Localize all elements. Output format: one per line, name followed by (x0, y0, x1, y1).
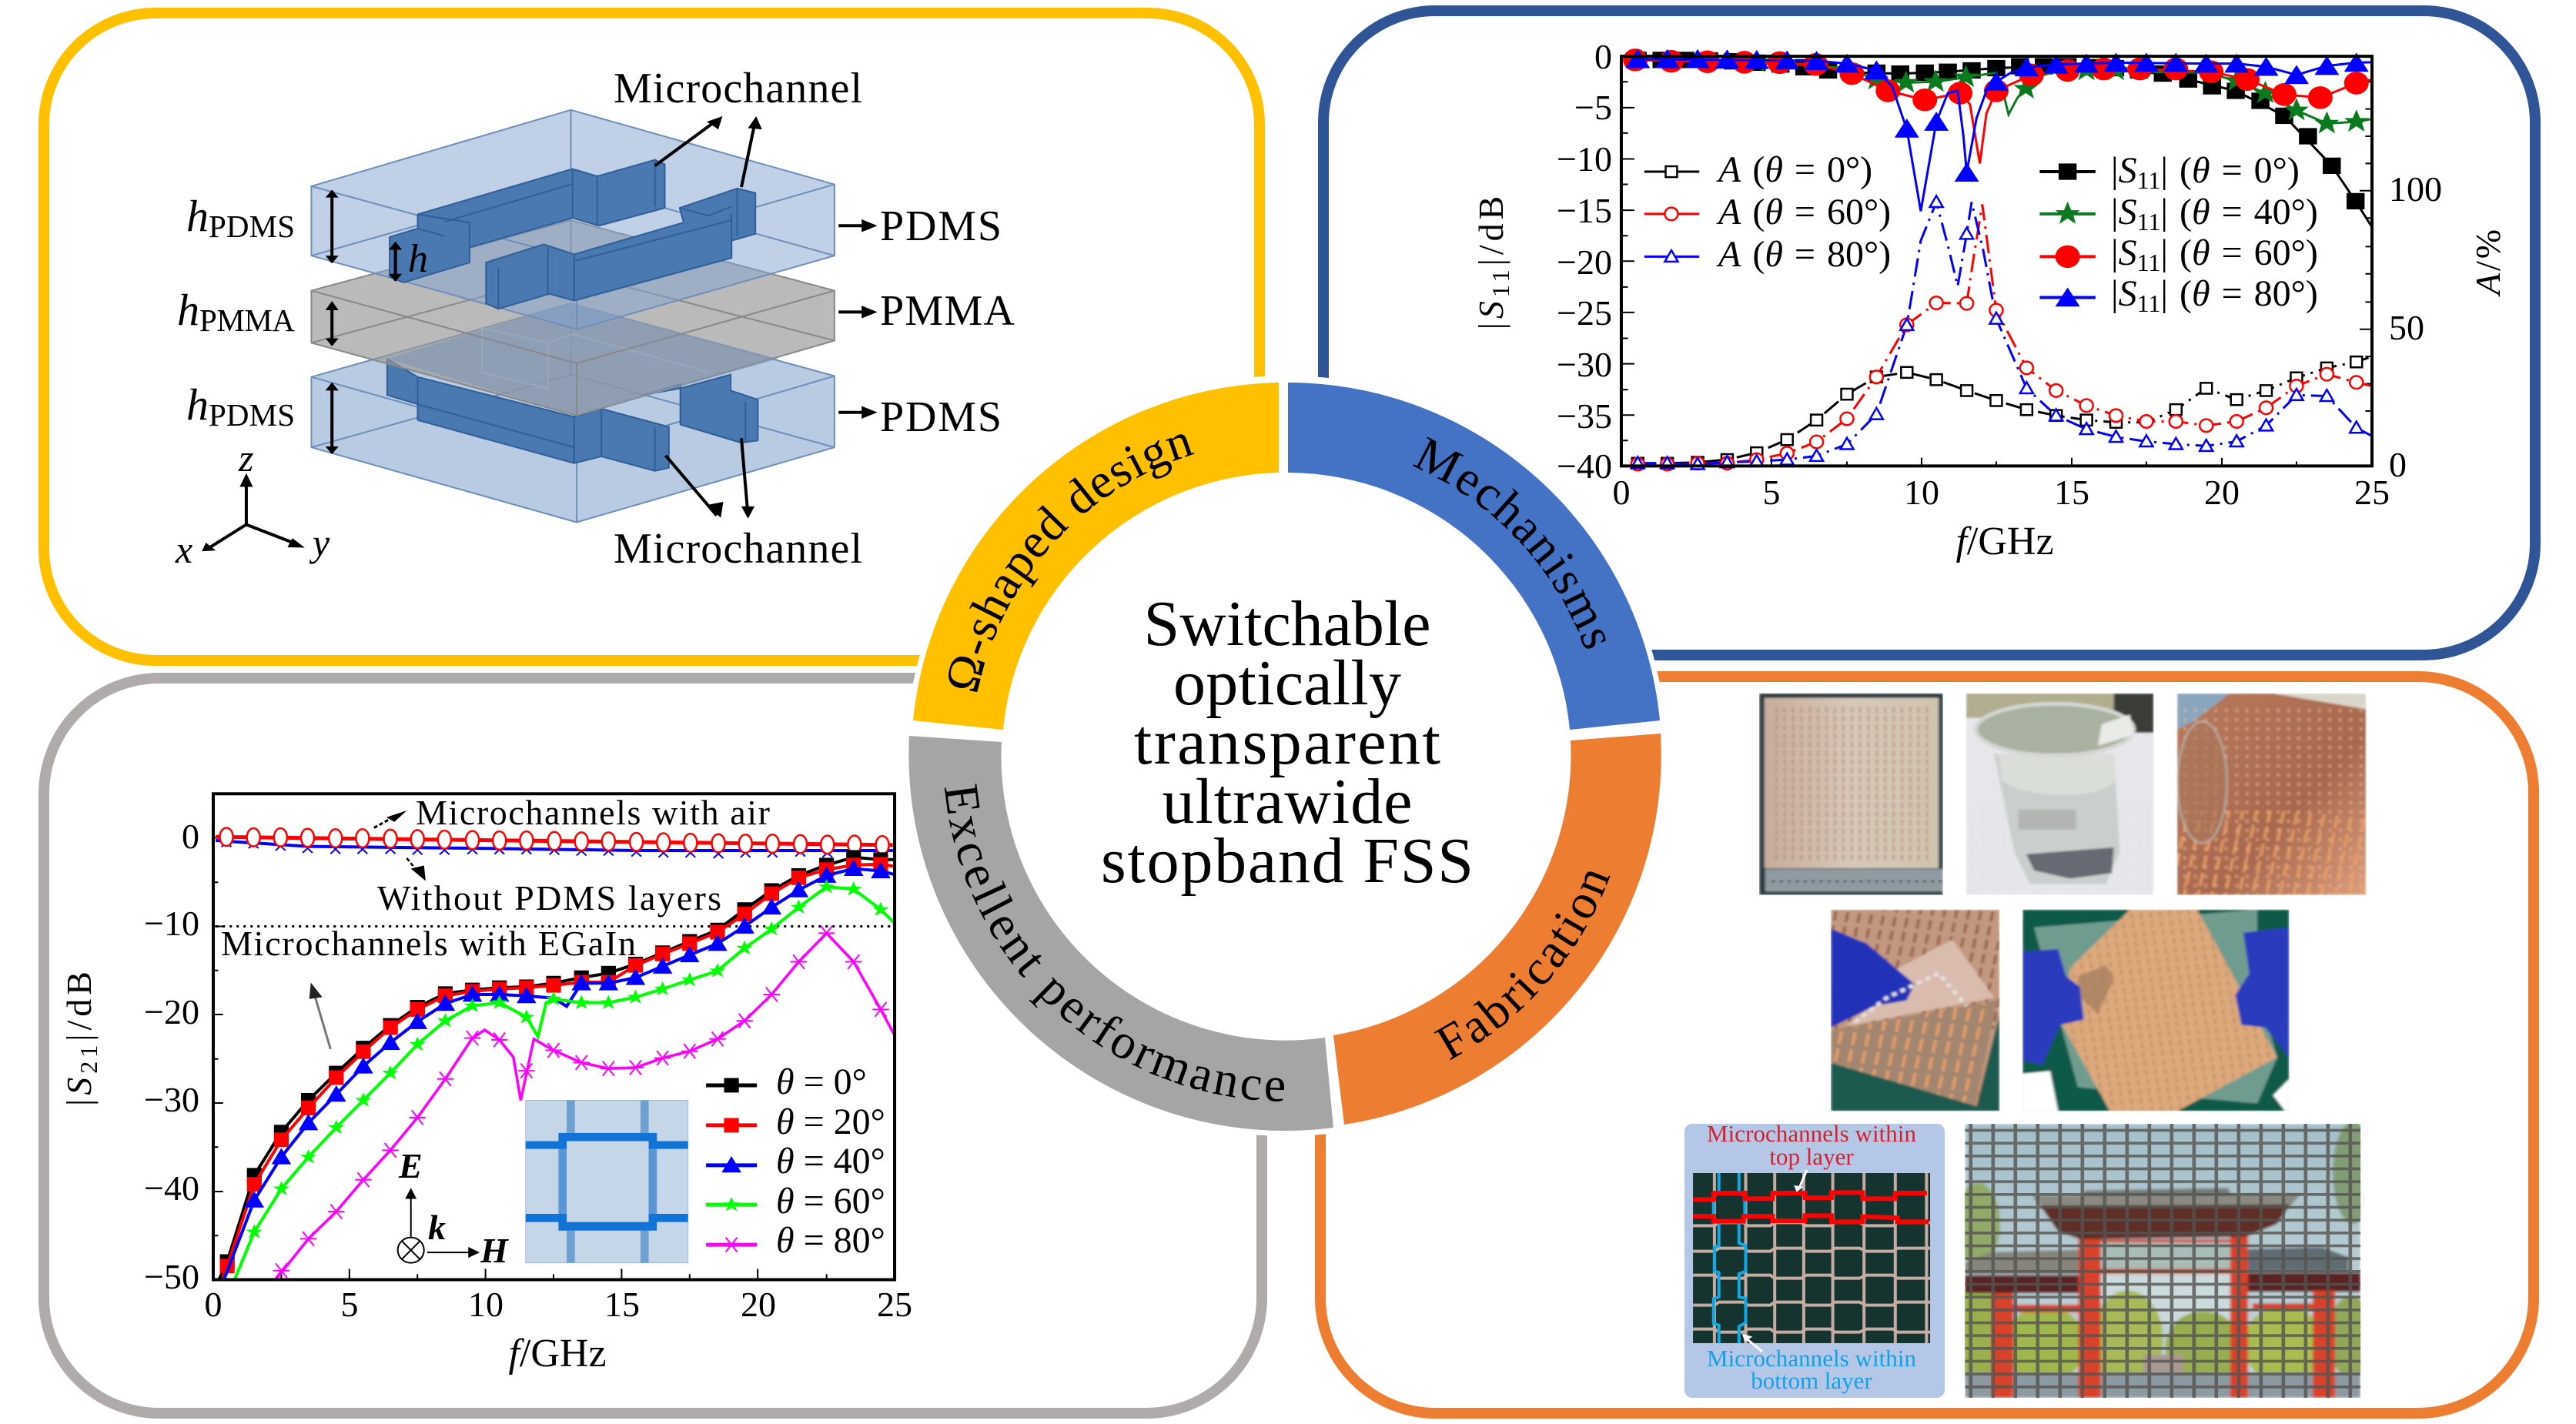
chart: reflection and absorption versus frequency: −25 (1557, 293, 1612, 333)
chart: transmission versus frequency: 20 (741, 1285, 776, 1324)
chart: reflection and absorption versus frequency: |S (1471, 297, 1510, 329)
chart: transmission versus frequency: 15 (604, 1285, 640, 1324)
chart: reflection and absorption versus frequency: 25 (2354, 473, 2390, 512)
structure diagram: layered FSS unit cell: PDMS (880, 393, 1002, 441)
chart: reflection and absorption versus frequency: 50 (2389, 308, 2424, 347)
structure diagram: layered FSS unit cell: h (408, 237, 428, 281)
center title: Switchable (1144, 588, 1430, 660)
chart: reflection and absorption versus frequency: −10 (1557, 139, 1612, 179)
chart: transmission versus frequency: θ = 0° (776, 1061, 867, 1102)
panel: excellent performance frame (44, 678, 1262, 1413)
ring segment: Ω-shaped design: Ω-shaped design (948, 434, 1195, 693)
chart: reflection and absorption versus frequency: −30 (1557, 345, 1612, 384)
chart: transmission versus frequency: θ = 20° (776, 1101, 885, 1142)
chart: transmission versus frequency: H (480, 1231, 509, 1270)
photo panel: fabricated microchannel close-up: top layer (1769, 1143, 1854, 1170)
chart: reflection and absorption versus frequency: −20 (1557, 242, 1612, 282)
chart: transmission versus frequency (59, 793, 912, 1376)
chart: reflection and absorption versus frequency: |S (2111, 273, 2137, 314)
chart: transmission versus frequency: −20 (144, 992, 199, 1031)
chart: reflection and absorption versus frequency (1471, 37, 2507, 563)
chart: reflection and absorption versus frequency: | ( (2160, 273, 2192, 314)
chart: transmission versus frequency: 5 (340, 1285, 359, 1324)
chart: reflection and absorption versus frequency: θ = 60°) (2192, 232, 2318, 273)
chart: reflection and absorption versus frequency: 11 (2137, 166, 2160, 194)
ring segment: Fabrication: Fabrication (1434, 871, 1611, 1061)
chart: reflection and absorption versus frequency: −40 (1557, 446, 1612, 486)
chart: transmission versus frequency: −40 (144, 1168, 199, 1208)
center title: ultrawide (1163, 766, 1412, 837)
chart: transmission versus frequency: |S (59, 1074, 99, 1106)
chart: reflection and absorption versus frequency: 100 (2389, 169, 2442, 209)
center title (1101, 588, 1474, 897)
ring segment: Fabrication (1333, 734, 1661, 1125)
photo: peeling transparent film off the mold (1831, 910, 1999, 1111)
chart: reflection and absorption versus frequency: 15 (2054, 473, 2089, 512)
chart: transmission versus frequency: −50 (144, 1257, 199, 1296)
photo panel: fabricated microchannel close-up: Microchannels within (1707, 1345, 1917, 1372)
photo: copper mold tilted with glass (2177, 694, 2366, 895)
chart: reflection and absorption versus frequency: 11 (1487, 266, 1514, 297)
structure diagram: layered FSS unit cell: PDMS (209, 209, 295, 244)
chart: transmission versus frequency: Microchannels with EGaIn (221, 924, 636, 963)
chart: transmission versus frequency: 21 (75, 1041, 102, 1074)
chart: reflection and absorption versus frequency: 11 (2137, 249, 2160, 276)
photo panel: fabricated microchannel close-up: Microchannels within (1707, 1120, 1917, 1147)
chart: reflection and absorption versus frequency: | ( (2160, 150, 2192, 191)
chart: reflection and absorption versus frequency: 0 (2389, 445, 2407, 484)
photo: beaker of liquid on grid paper (1966, 694, 2153, 895)
center title: stopband FSS (1101, 825, 1474, 897)
photo: transparent film held by gloved hands (2022, 910, 2289, 1111)
chart: reflection and absorption versus frequency: | ( (2160, 192, 2192, 232)
chart: reflection and absorption versus frequency: 20 (2204, 473, 2240, 512)
chart: transmission versus frequency: 25 (877, 1285, 912, 1324)
structure diagram: layered FSS unit cell: PMMA (880, 287, 1015, 335)
chart: transmission versus frequency: 10 (468, 1285, 503, 1324)
chart: transmission versus frequency: θ = 40° (776, 1141, 885, 1182)
chart: reflection and absorption versus frequency: A/% (2468, 227, 2507, 297)
chart: reflection and absorption versus frequency: 10 (1904, 473, 1939, 512)
structure diagram: layered FSS unit cell: h (186, 379, 209, 430)
chart: reflection and absorption versus frequency: −35 (1557, 396, 1612, 436)
structure diagram: layered FSS unit cell: h (177, 285, 199, 335)
chart: reflection and absorption versus frequency: A (θ = 0°) (1716, 149, 1872, 190)
structure diagram: layered FSS unit cell: Microchannel (614, 525, 862, 573)
center disc backdrop (906, 376, 1667, 1136)
structure diagram: layered FSS unit cell: x (175, 528, 192, 571)
center title: transparent (1134, 707, 1440, 778)
chart: transmission versus frequency: 0 (205, 1285, 222, 1324)
chart: reflection and absorption versus frequency: | ( (2160, 232, 2192, 273)
chart: reflection and absorption versus frequency: 5 (1763, 473, 1780, 512)
structure diagram: layered FSS unit cell: y (309, 521, 330, 564)
chart: reflection and absorption versus frequency: A (θ = 60°) (1716, 192, 1891, 232)
panel: Ω-shaped design frame (44, 13, 1260, 660)
chart: reflection and absorption versus frequency: −5 (1574, 88, 1612, 127)
chart: transmission versus frequency: θ = 60° (776, 1181, 885, 1222)
chart: reflection and absorption versus frequency: 11 (2137, 289, 2160, 317)
photo: archway seen through transparent mesh (1949, 1121, 2373, 1398)
chart: reflection and absorption versus frequency: f/GHz (1955, 520, 2054, 563)
ring segment: Mechanisms: Mechanisms (1413, 437, 1606, 649)
chart: transmission versus frequency: −10 (144, 904, 199, 943)
chart: reflection and absorption versus frequency: θ = 80°) (2192, 273, 2318, 314)
chart: reflection and absorption versus frequency: |S (2111, 192, 2137, 232)
chart: transmission versus frequency: −30 (144, 1080, 199, 1119)
structure diagram: layered FSS unit cell (175, 65, 1015, 573)
chart: reflection and absorption versus frequency: A (θ = 80°) (1716, 234, 1891, 275)
chart: transmission versus frequency: Microchannels with air (416, 793, 770, 832)
panel: fabrication frame (1320, 677, 2534, 1413)
chart: reflection and absorption versus frequency: 0 (1612, 473, 1631, 512)
photo: copper master mold with ruler (1759, 694, 1943, 895)
chart: reflection and absorption versus frequency: |/dB (1471, 192, 1510, 266)
chart: reflection and absorption versus frequency: |S (2111, 232, 2137, 273)
structure diagram: layered FSS unit cell: PMMA (199, 303, 295, 338)
chart: transmission versus frequency: 0 (182, 817, 199, 856)
structure diagram: layered FSS unit cell: Microchannel (614, 65, 862, 112)
chart: transmission versus frequency: f/GHz (508, 1332, 607, 1376)
photo panel: fabricated microchannel close-up: bottom layer (1751, 1367, 1872, 1394)
ring segment: Mechanisms (1288, 383, 1660, 730)
chart: reflection and absorption versus frequency: θ = 0°) (2192, 150, 2300, 191)
chart: transmission versus frequency: k (428, 1208, 446, 1247)
chart: transmission versus frequency: Without PDMS layers (377, 878, 721, 918)
chart: reflection and absorption versus frequency: |S (2111, 150, 2137, 191)
structure diagram: layered FSS unit cell: PDMS (209, 397, 295, 433)
chart: transmission versus frequency: E (398, 1146, 423, 1185)
photo panel: fabricated microchannel close-up (1684, 1120, 1945, 1398)
chart: reflection and absorption versus frequency: 0 (1594, 37, 1612, 76)
chart: reflection and absorption versus frequency: −15 (1557, 191, 1612, 230)
chart: reflection and absorption versus frequency: 11 (2137, 208, 2160, 236)
ring segment: Excellent performance: Excellent performance (944, 784, 1284, 1102)
ring segment: Ω-shaped design (913, 383, 1279, 730)
chart: reflection and absorption versus frequency: θ = 40°) (2192, 192, 2318, 232)
structure diagram: layered FSS unit cell: PDMS (880, 202, 1002, 250)
structure diagram: layered FSS unit cell: h (186, 191, 209, 241)
center title: optically (1173, 647, 1401, 719)
panel: mechanisms frame (1323, 11, 2535, 655)
structure diagram: layered FSS unit cell: z (238, 436, 253, 480)
chart: transmission versus frequency: θ = 80° (776, 1220, 885, 1261)
chart: transmission versus frequency: |/dB (59, 968, 99, 1041)
